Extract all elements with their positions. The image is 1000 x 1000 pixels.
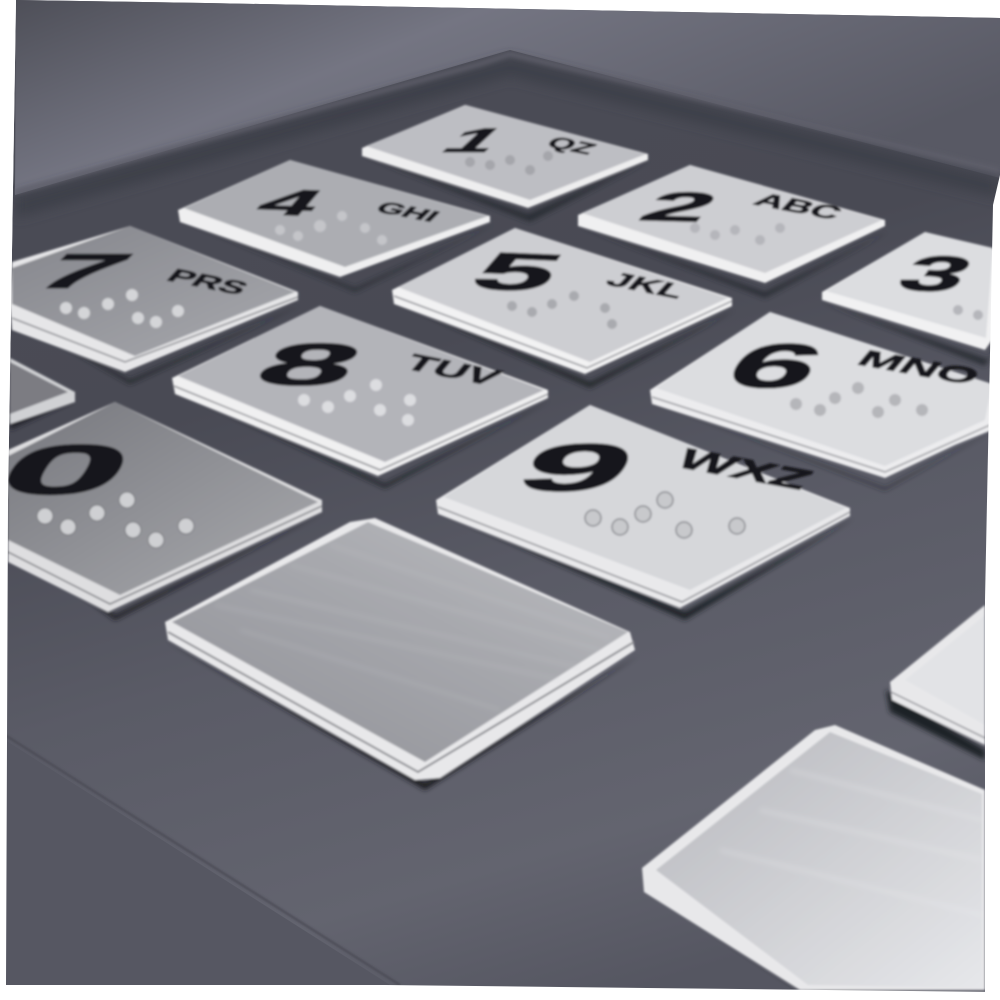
- panel: floor seam line: [0, 735, 400, 985]
- key: 5: [392, 228, 736, 388]
- key: 9: 9: [501, 429, 653, 506]
- key: 6: 6: [712, 330, 839, 402]
- key: 3: 3: [885, 245, 986, 303]
- key: 7: 7: [18, 244, 148, 298]
- key: 2: ABC: [749, 189, 848, 223]
- key: 2: 2: [629, 184, 730, 231]
- key: 5: JKL: [601, 268, 693, 303]
- key: 5: 5: [458, 241, 576, 303]
- key: 4: 4: [245, 182, 335, 224]
- key: 9: WXZ: [668, 443, 820, 496]
- key: 8: 8: [242, 331, 377, 399]
- key: 8: [172, 306, 552, 488]
- key: 1: 1: [430, 122, 519, 160]
- key: 4: GHI: [371, 198, 445, 225]
- key: 8: TUV: [398, 349, 508, 390]
- key: large blank: [165, 518, 640, 790]
- key: small left fragment: [10, 358, 75, 430]
- key: 7: [10, 226, 302, 384]
- key: 1: [362, 105, 650, 222]
- key: 3: [822, 232, 1000, 366]
- key: 4: [178, 160, 495, 292]
- key: 0: [0, 402, 326, 620]
- key: 9: [436, 405, 855, 620]
- panel: raised top frame: [15, 0, 1000, 218]
- key: 6: [650, 312, 995, 490]
- key: 2: [578, 165, 888, 298]
- key: right fragment: [886, 605, 985, 760]
- key: 1: QZ: [542, 133, 601, 158]
- key: bottom right large blank: [640, 725, 990, 995]
- key: 7: PRS: [162, 265, 254, 299]
- key: 6: MNO: [851, 345, 987, 390]
